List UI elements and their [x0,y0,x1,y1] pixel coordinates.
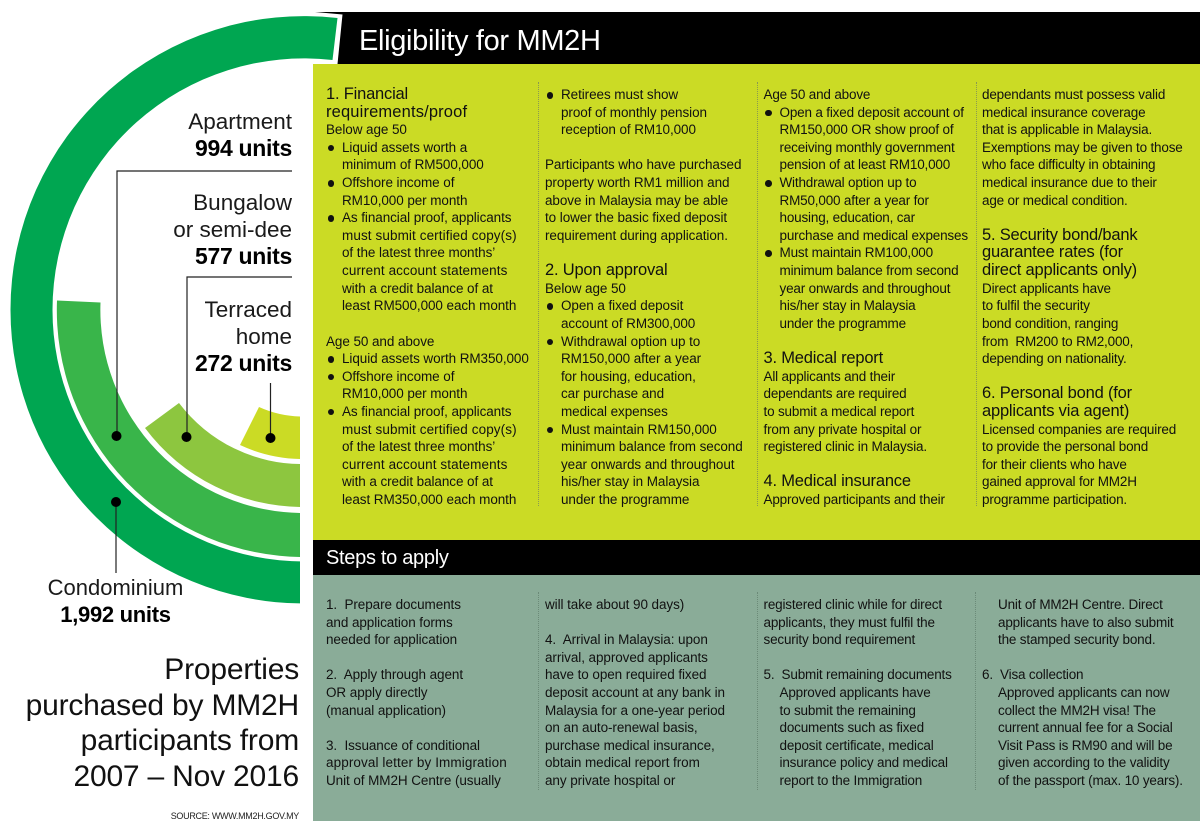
eligibility column 1: Offshore income of [342,369,454,384]
steps column 1: and application forms [326,615,453,630]
steps column 1: Unit of MM2H Centre (usually [326,773,501,788]
eligibility column 3: 4. Medical insurance [764,472,911,490]
eligibility column 4: 5. Security bond/bank [982,226,1137,244]
steps column 4: given according to the validity [998,755,1170,770]
steps column 3: Approved applicants have [780,685,931,700]
steps column 2: Malaysia for a one-year period [545,703,725,718]
steps column 3: 5. Submit remaining documents [764,667,952,682]
eligibility column 2: 2. Upon approval [545,261,667,279]
eligibility column 1: Age 50 and above [326,334,434,349]
eligibility column 3: Must maintain RM100,000 [780,245,933,260]
steps column 4: Visit Pass is RM90 and will be [998,738,1172,753]
eligibility column 3: from any private hospital or [764,422,921,437]
eligibility column 3: receiving monthly government [780,140,955,155]
eligibility column 2: Open a fixed deposit [561,298,683,313]
eligibility column 4 [982,87,1183,507]
eligibility column 1: RM10,000 per month [342,386,467,401]
eligibility column 3: year onwards and throughout [780,281,950,296]
eligibility column 4: that is applicable in Malaysia. [982,122,1152,137]
eligibility column 4: applicants via agent) [982,402,1129,420]
steps column 4: 6. Visa collection [982,667,1083,682]
chart title: participants from [81,724,299,757]
eligibility column 1: of the latest three months’ [342,245,495,260]
chart title: Properties [164,653,299,686]
eligibility column 2: above in Malaysia may be able [545,193,728,208]
steps column 4 [982,597,1183,788]
eligibility column 4: for their clients who have [982,457,1127,472]
label: terraced: Terraced [204,297,292,322]
eligibility column 1: As financial proof, applicants [342,210,511,225]
steps column 2: have to open required fixed [545,667,706,682]
label: apartment: 994 units [195,135,292,161]
eligibility column 1 [326,85,529,507]
steps column 2 [545,597,725,788]
steps column 1: approval letter by Immigration [326,755,507,770]
steps column 1: (manual application) [326,703,446,718]
eligibility column 2: Must maintain RM150,000 [561,422,717,437]
eligibility column 3: dependants are required [764,386,906,401]
panel: eligibility background [313,64,1200,540]
arc: condominium [10,16,337,604]
eligibility column 2: his/her stay in Malaysia [561,474,699,489]
source: SOURCE: WWW.MM2H.GOV.MY [171,811,299,821]
chart: concentric arcs of property types [10,16,338,604]
eligibility column 1: Below age 50 [326,122,407,137]
eligibility column 2: to lower the basic fixed deposit [545,210,727,225]
eligibility column 2: requirement during application. [545,228,728,243]
eligibility column 2: proof of monthly pension [561,105,707,120]
steps column 2: any private hospital or [545,773,675,788]
steps column 1: 2. Apply through agent [326,667,463,682]
eligibility column 1: least RM500,000 each month [342,298,516,313]
eligibility column 2: Below age 50 [545,281,626,296]
heading bar: Steps to apply: Steps to apply [326,547,449,569]
eligibility column 3: his/her stay in Malaysia [780,298,916,313]
eligibility column 1: As financial proof, applicants [342,404,511,419]
eligibility column 4: to provide the personal bond [982,439,1148,454]
label: apartment [188,109,292,161]
eligibility column 1: with a credit balance of at [342,281,493,296]
eligibility column 4: medical insurance coverage [982,105,1145,120]
eligibility column 1: Liquid assets worth RM350,000 [342,351,529,366]
steps column 2: obtain medical report from [545,755,700,770]
eligibility column 2: RM150,000 after a year [561,351,701,366]
eligibility column 4: programme participation. [982,492,1127,507]
leader line: condominium [111,497,121,573]
eligibility column 4: gained approval for MM2H [982,474,1137,489]
steps column 3: security bond requirement [764,632,915,647]
label: bungalow: Bungalow [193,190,292,215]
eligibility column 3 [764,87,968,507]
eligibility column 3: minimum balance from second [780,263,958,278]
steps column 1: 3. Issuance of conditional [326,738,480,753]
eligibility column 4: medical insurance due to their [982,175,1157,190]
eligibility column 4: dependants must possess valid [982,87,1165,102]
steps column 4: the stamped security bond. [998,632,1155,647]
label: terraced: 272 units [195,350,292,376]
arc: terraced home [240,407,304,459]
steps column 1: needed for application [326,632,457,647]
label: bungalow [173,190,292,269]
eligibility column 1: minimum of RM500,000 [342,157,484,172]
eligibility column 2: minimum balance from second [561,439,743,454]
dividers [538,82,539,506]
label: condominium [48,575,183,627]
arc: bungalow or semi-dee [145,403,304,507]
eligibility column 3: Approved participants and their [764,492,945,507]
eligibility column 2: car purchase and [561,386,664,401]
steps column 3: report to the Immigration [780,773,922,788]
eligibility column 4: Direct applicants have [982,281,1111,296]
steps column 1 [326,597,507,788]
label: bungalow: 577 units [195,243,292,269]
eligibility column 2: Retirees must show [561,87,678,102]
label: apartment: Apartment [188,109,292,134]
eligibility column 4: Exemptions may be given to those [982,140,1183,155]
eligibility column 3: Age 50 and above [764,87,870,102]
heading bar: Steps to apply [313,540,1200,575]
steps column 3: registered clinic while for direct [764,597,942,612]
eligibility column 3: purchase and medical expenses [780,228,968,243]
steps column 2: will take about 90 days) [545,597,684,612]
steps column 4: Approved applicants can now [998,685,1170,700]
eligibility column 1: least RM350,000 each month [342,492,516,507]
steps column 1: OR apply directly [326,685,427,700]
eligibility column 3: All applicants and their [764,369,895,384]
steps column 2: 4. Arrival in Malaysia: upon [545,632,708,647]
leader line: terraced [266,383,276,443]
eligibility column 2: property worth RM1 million and [545,175,729,190]
eligibility column 1: 1. Financial [326,85,408,103]
eligibility column 2: account of RM300,000 [561,316,695,331]
steps column 3 [764,597,952,788]
eligibility column 4: Licensed companies are required [982,422,1176,437]
eligibility column 1: RM10,000 per month [342,193,467,208]
chart title: 2007 – Nov 2016 [73,760,299,792]
steps column 2: arrival, approved applicants [545,650,708,665]
steps column 2: deposit account at any bank in [545,685,725,700]
steps column 3: insurance policy and medical [780,755,948,770]
eligibility column 2: year onwards and throughout [561,457,734,472]
chart title: purchased by MM2H [26,688,299,722]
steps column 4: applicants have to also submit [998,615,1173,630]
eligibility column 1: of the latest three months’ [342,439,495,454]
eligibility column 3: to submit a medical report [764,404,914,419]
eligibility column 4: from RM200 to RM2,000, [982,334,1133,349]
label: condominium: Condominium [48,575,183,600]
eligibility column 4: bond condition, ranging [982,316,1118,331]
eligibility column 2: under the programme [561,492,689,507]
steps column 3: deposit certificate, medical [780,738,934,753]
label: terraced: home [236,324,292,349]
eligibility column 2: Withdrawal option up to [561,334,700,349]
eligibility column 4: guarantee rates (for [982,243,1123,261]
heading bar: Eligibility for MM2H [315,12,1200,64]
eligibility column 3: registered clinic in Malaysia. [764,439,927,454]
panel: steps background [313,575,1200,821]
eligibility column 4: to fulfil the security [982,298,1090,313]
eligibility column 4: direct applicants only) [982,261,1137,279]
steps column 4: current annual fee for a Social [998,720,1173,735]
eligibility column 1: requirements/proof [326,103,467,121]
eligibility column 3: RM50,000 after a year for [780,193,929,208]
chart title [26,653,299,792]
eligibility column 3: housing, education, car [780,210,915,225]
label: bungalow: or semi-dee [173,217,292,242]
leader line: bungalow [182,277,292,442]
eligibility column 3: 3. Medical report [764,349,883,367]
arc: apartment [57,300,304,557]
eligibility column 1: must submit certified copy(s) [342,422,517,437]
eligibility column 1: with a credit balance of at [342,474,493,489]
label: condominium: 1,992 units [60,602,171,627]
eligibility column 4: depending on nationality. [982,351,1127,366]
eligibility column 3: under the programme [780,316,906,331]
eligibility column 1: current account statements [342,263,507,278]
steps column 4: collect the MM2H visa! The [998,703,1156,718]
eligibility column 1: Offshore income of [342,175,454,190]
eligibility column 4: age or medical condition. [982,193,1128,208]
eligibility column 4: who face difficulty in obtaining [982,157,1155,172]
eligibility column 1: current account statements [342,457,507,472]
eligibility column 2 [545,87,743,507]
eligibility column 4: 6. Personal bond (for [982,384,1132,402]
steps column 1: 1. Prepare documents [326,597,461,612]
steps column 3: applicants, they must fulfil the [764,615,935,630]
eligibility column 3: RM150,000 OR show proof of [780,122,953,137]
eligibility column 3: pension of at least RM10,000 [780,157,950,172]
steps column 3: to submit the remaining [780,703,916,718]
eligibility column 3: Open a fixed deposit account of [780,105,964,120]
eligibility column 1: must submit certified copy(s) [342,228,517,243]
steps column 4: of the passport (max. 10 years). [998,773,1183,788]
steps column 2: purchase medical insurance, [545,738,715,753]
eligibility column 2: for housing, education, [561,369,696,384]
eligibility column 2: Participants who have purchased [545,157,741,172]
heading bar: Eligibility for MM2H: Eligibility for MM2H [359,25,601,57]
steps column 3: documents such as fixed [780,720,924,735]
eligibility column 1: Liquid assets worth a [342,140,467,155]
steps column 2: on an auto-renewal basis, [545,720,698,735]
leader line: apartment [112,171,292,441]
white mask right of chart bottom [300,300,313,620]
eligibility column 2: medical expenses [561,404,668,419]
eligibility column 3: Withdrawal option up to [780,175,916,190]
eligibility column 2: reception of RM10,000 [561,122,696,137]
steps column 4: Unit of MM2H Centre. Direct [998,597,1163,612]
label: terraced [195,297,292,376]
